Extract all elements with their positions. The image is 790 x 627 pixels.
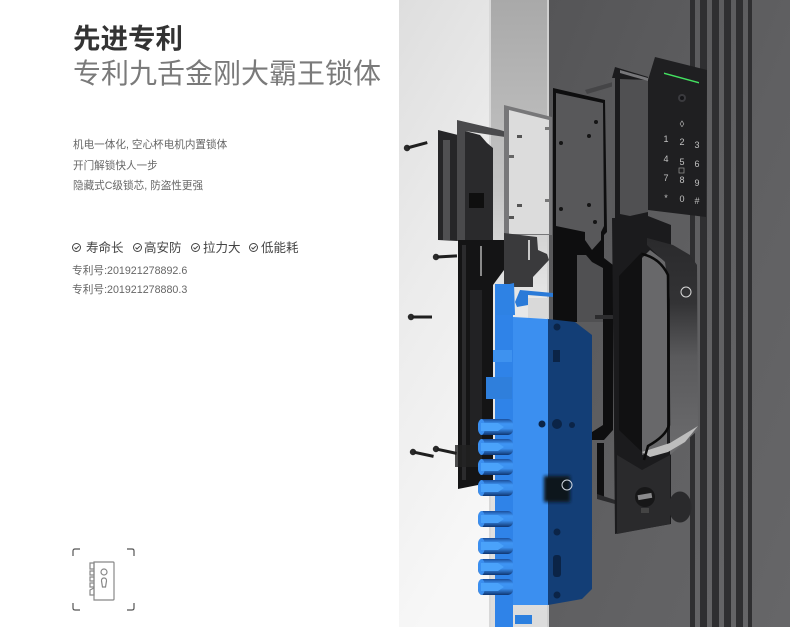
benefit checklist: 拉力大 — [203, 240, 241, 254]
background: wall, glass, door — [399, 0, 790, 627]
keypad panel: 6 — [694, 159, 700, 169]
keypad panel: 2 — [679, 137, 685, 147]
keypad panel: * — [664, 193, 668, 203]
keypad panel: 3 — [694, 140, 700, 150]
keypad panel: 5 — [679, 157, 685, 167]
keypad panel: 4 — [663, 154, 669, 164]
thumb turn — [635, 487, 655, 513]
blue lock body — [486, 283, 592, 627]
patent numbers: 专利号:201921278880.3 — [72, 284, 187, 296]
door stripes — [690, 0, 752, 627]
screws — [403, 139, 457, 459]
feature description: 机电一体化, 空心杯电机内置锁体 — [73, 139, 227, 151]
translucent gasket — [504, 105, 552, 287]
title: 先进专利 — [73, 23, 183, 54]
keypad panel: 1 — [663, 134, 669, 144]
benefit checklist — [72, 240, 299, 254]
keypad panel: 7 — [663, 173, 669, 183]
keypad panel: 0 — [679, 194, 685, 204]
keypad panel: ◊ — [680, 119, 685, 129]
handle — [642, 238, 698, 460]
benefit checklist: 低能耗 — [261, 240, 299, 254]
feature description — [73, 138, 227, 192]
keypad panel: 8 — [679, 175, 685, 185]
black gasket — [553, 88, 617, 504]
icon: lock body in corner brackets — [72, 548, 135, 611]
feature description: 开门解锁快人一步 — [73, 160, 158, 172]
benefit checklist: 寿命长 — [86, 240, 124, 254]
patent numbers: 专利号:201921278892.6 — [72, 264, 187, 276]
feature description: 隐藏式C级锁芯, 防盗性更强 — [73, 180, 203, 192]
benefit checklist: 高安防 — [144, 240, 182, 254]
subtitle: 专利九舌金刚大霸王锁体 — [73, 58, 381, 89]
handle plate — [585, 67, 671, 534]
keypad panel — [648, 57, 707, 217]
round cover — [668, 492, 692, 522]
lock bolts — [478, 419, 513, 595]
rear mounting frame — [438, 120, 510, 489]
keypad panel: 9 — [694, 178, 700, 188]
patent numbers — [72, 264, 187, 296]
keypad panel: # — [694, 196, 700, 206]
